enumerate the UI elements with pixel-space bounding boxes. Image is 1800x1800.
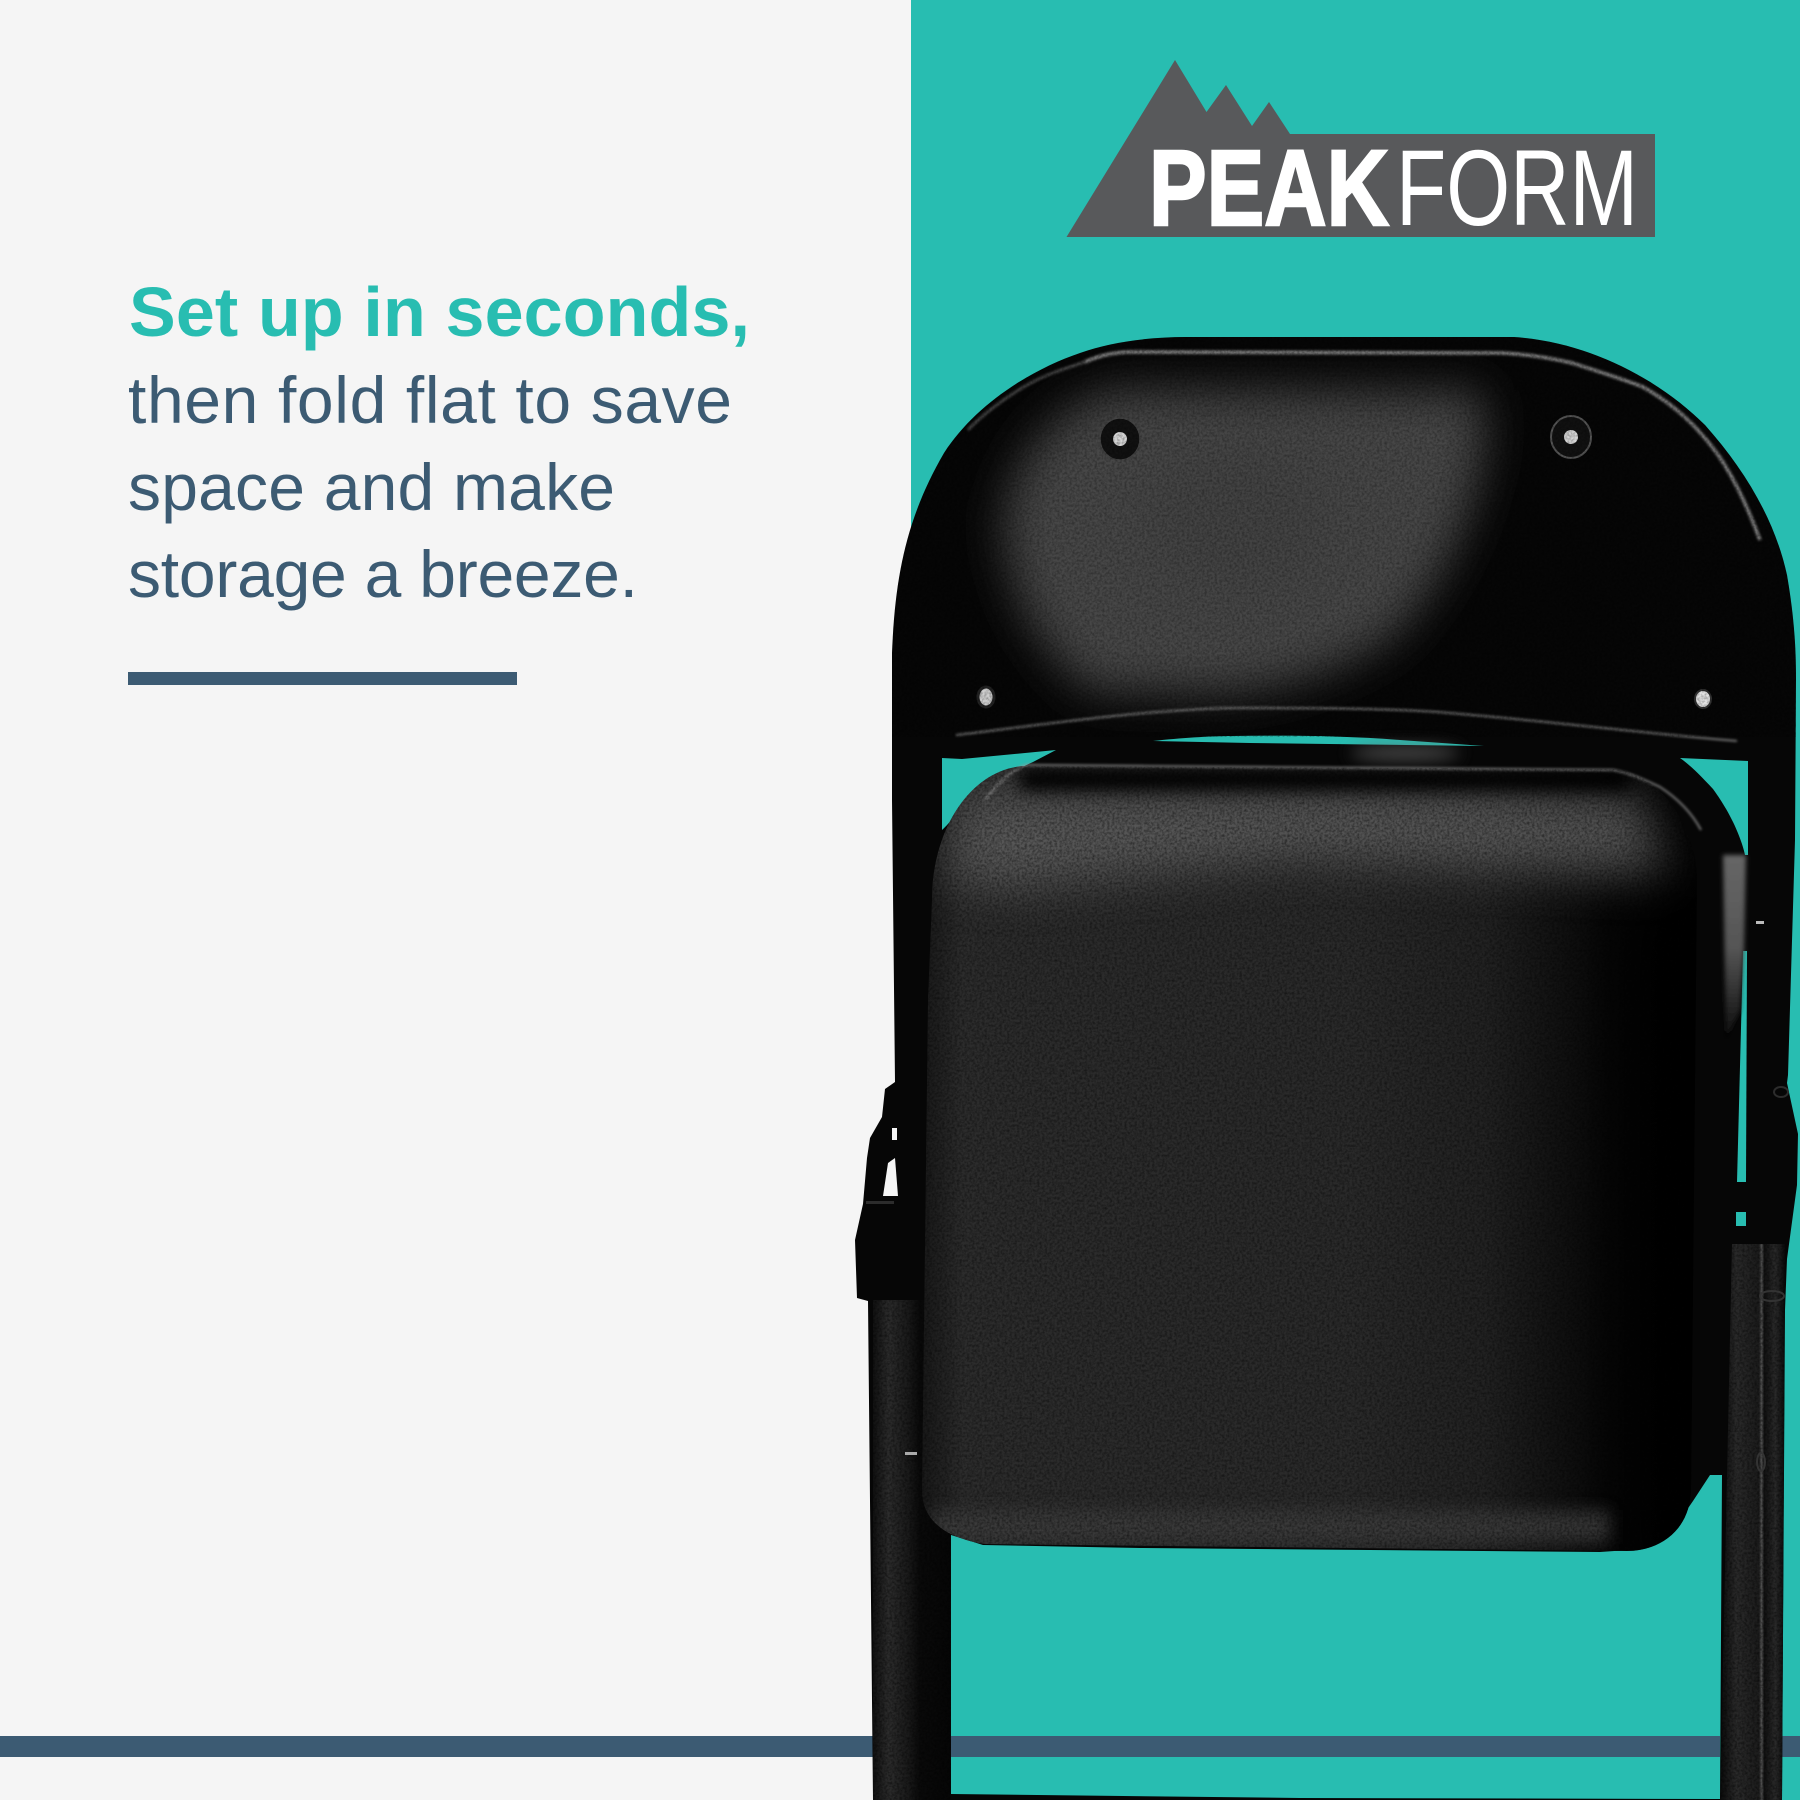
left hinge window [883,1158,898,1196]
logo wordmark FORM: FORM [1396,127,1638,248]
darker centre mottling [1145,450,1325,590]
left hinge slot [892,1128,897,1140]
right hinge details [1756,921,1788,1471]
small opening at right hinge [1736,1212,1746,1226]
description line 3: storage a breeze. [128,537,638,611]
seat back lower edge highlight [956,708,1737,741]
description line 2: space and make [128,450,615,524]
seat cushion [922,766,1688,1551]
logo wordmark PEAK: PEAK [1149,127,1389,248]
lower right leg [1720,1244,1785,1800]
opening right of seat [1680,758,1748,855]
frame highlight left [968,362,1085,430]
rivet top right [1551,416,1591,458]
leather grain [915,760,1705,1560]
bottom light band [930,1510,1610,1544]
frame highlight right [1085,352,1760,540]
footer stripe [0,1736,1800,1757]
headline: Set up in seconds, [129,273,750,351]
top glossy band [945,790,1670,890]
background: light left panel [0,0,912,1800]
left hinge details [866,1201,917,1455]
logo: PeakForm [1066,60,1655,248]
rivet top left [1100,418,1140,460]
leg grain [860,1240,1790,1800]
chair silhouette [855,337,1798,1800]
right shadow of cushion [1629,1508,1688,1551]
opening behind seat back [1153,736,1484,746]
seat back cross band gloss [1350,746,1460,760]
accent rule [128,672,517,685]
seat top edge highlight [985,765,1701,830]
footer stripe seen through chair [951,1736,1720,1757]
opening left of seat [942,750,1056,830]
description line 1: then fold flat to save [128,363,732,437]
seat back grain [892,337,1797,737]
top shadow of cushion [1020,768,1630,790]
opening below seat [951,1475,1722,1799]
rivet bottom right [1695,690,1711,708]
text block: headline and description [128,273,750,611]
background: teal right panel [911,0,1800,1800]
illustration: folded black chair [855,337,1798,1800]
right seat frame gloss [1723,855,1746,1040]
lower left leg [873,1300,951,1800]
seat back panel highlight [1003,388,1486,695]
rivet bottom left [978,687,994,707]
sliver right of seat [1737,951,1747,1182]
logo mountain and banner shape [1066,60,1655,237]
